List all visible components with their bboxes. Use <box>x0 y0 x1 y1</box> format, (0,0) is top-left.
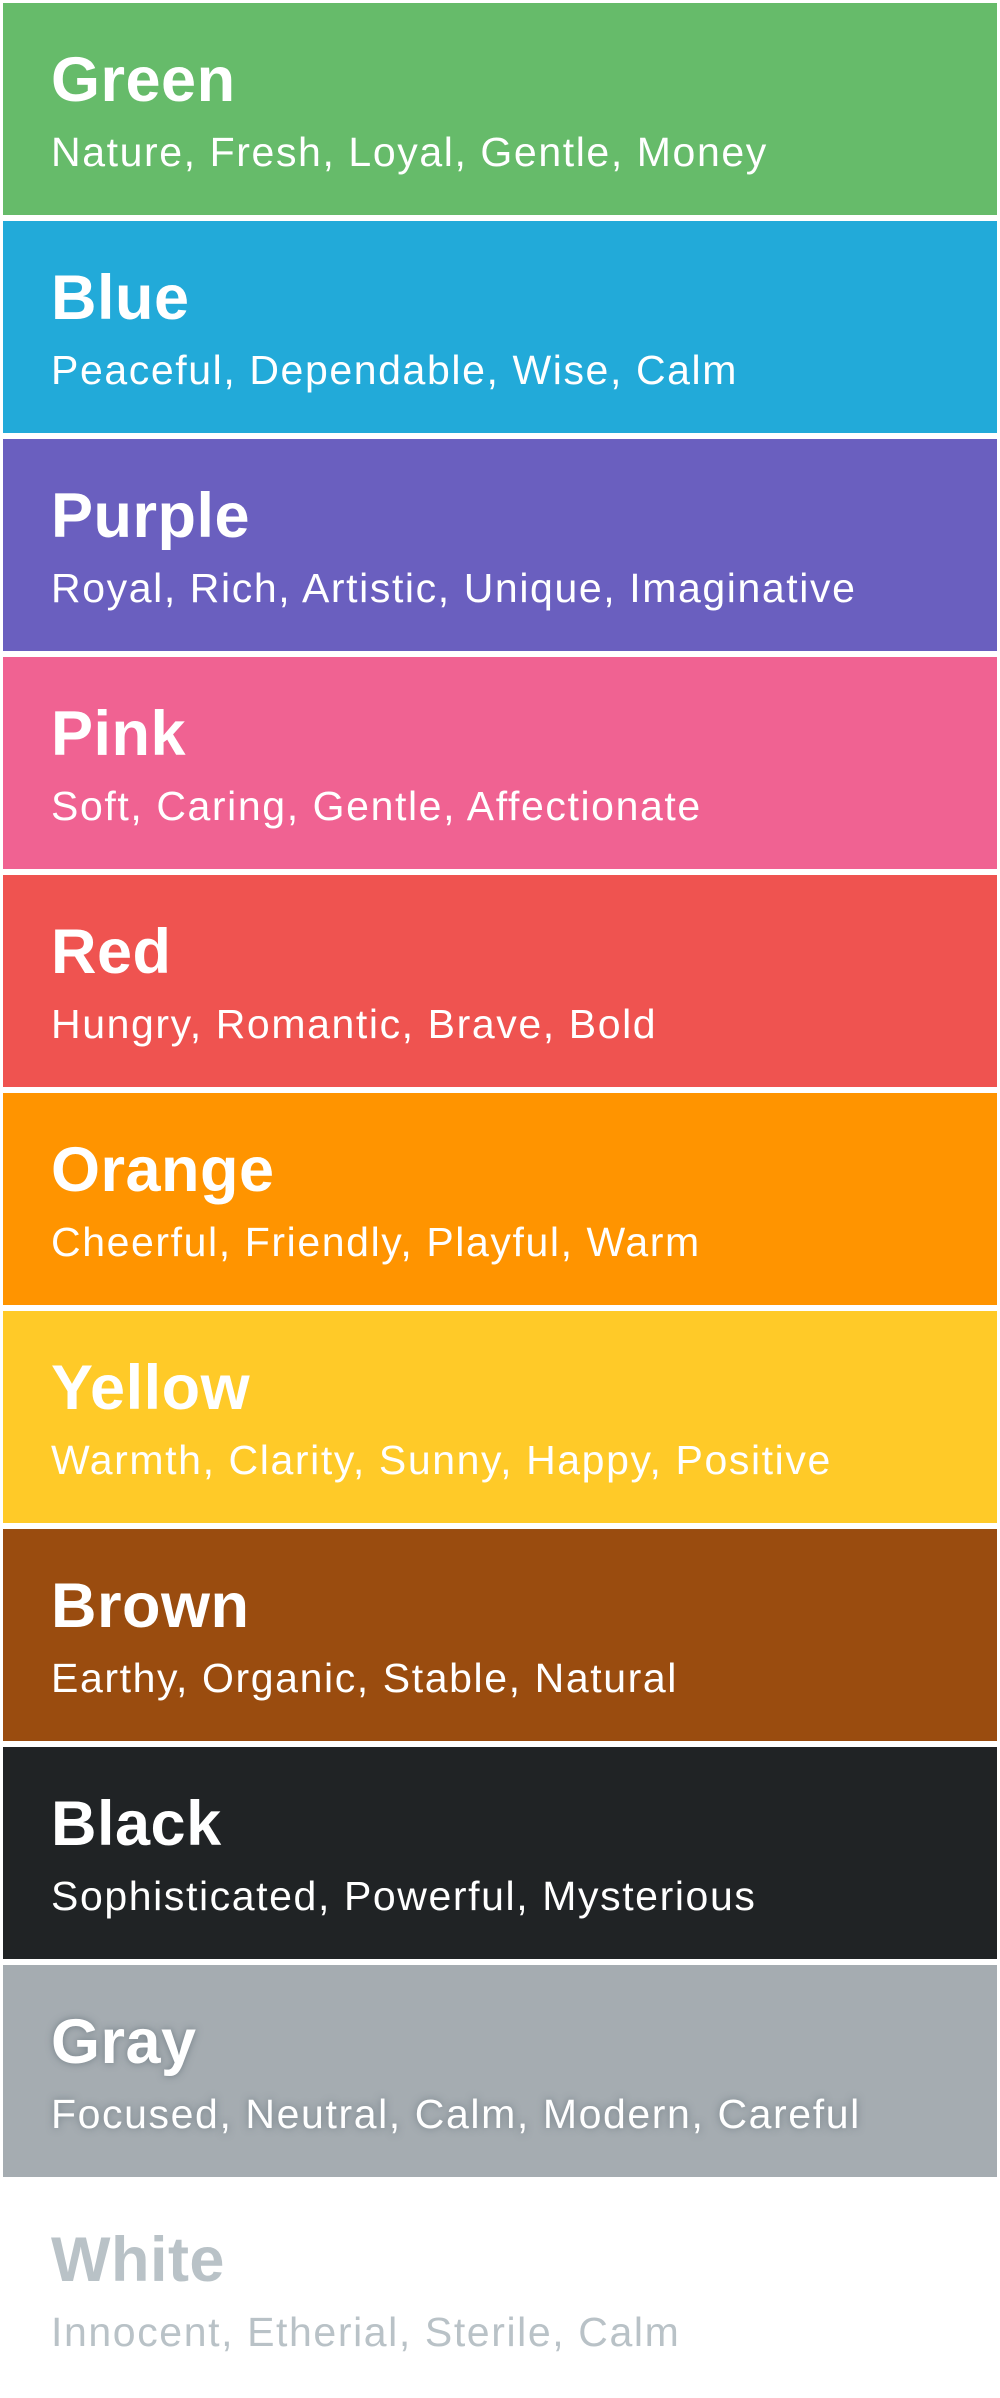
heading: orange: Orange <box>51 1135 275 1205</box>
heading: purple: Purple <box>51 481 250 551</box>
text: purple traits: Royal, Rich, Artistic, Unique, Imaginative <box>51 565 856 611</box>
band: black <box>3 1747 997 1959</box>
heading: green: Green <box>51 45 236 115</box>
band: orange <box>3 1093 997 1305</box>
heading: brown: Brown <box>51 1571 249 1641</box>
text: red traits: Hungry, Romantic, Brave, Bold <box>51 1001 657 1047</box>
text: black traits: Sophisticated, Powerful, Mysterious <box>51 1873 756 1919</box>
band: pink <box>3 657 997 869</box>
band: brown <box>3 1529 997 1741</box>
heading: red: Red <box>51 917 172 987</box>
text: brown traits: Earthy, Organic, Stable, Natural <box>51 1655 678 1701</box>
band: white <box>3 2183 997 2395</box>
heading: blue: Blue <box>51 263 190 333</box>
heading: white: White <box>51 2225 225 2295</box>
band: purple <box>3 439 997 651</box>
band: yellow <box>3 1311 997 1523</box>
text: orange traits: Cheerful, Friendly, Playful, Warm <box>51 1219 701 1265</box>
text: blue traits: Peaceful, Dependable, Wise, Calm <box>51 347 738 393</box>
text: pink traits: Soft, Caring, Gentle, Affectionate <box>51 783 702 829</box>
band: green <box>3 3 997 215</box>
text: white traits: Innocent, Etherial, Sterile, Calm <box>51 2309 680 2355</box>
text: green traits: Nature, Fresh, Loyal, Gentle, Money <box>51 129 768 175</box>
band: blue <box>3 221 997 433</box>
heading: black: Black <box>51 1789 222 1859</box>
text: yellow traits: Warmth, Clarity, Sunny, Happy, Positive <box>51 1437 832 1483</box>
band: red <box>3 875 997 1087</box>
heading: yellow: Yellow <box>51 1353 250 1423</box>
band: gray <box>3 1965 997 2177</box>
text: gray traits: Focused, Neutral, Calm, Modern, Careful <box>51 2091 861 2137</box>
heading: gray: Gray <box>51 2007 197 2077</box>
heading: pink: Pink <box>51 699 186 769</box>
